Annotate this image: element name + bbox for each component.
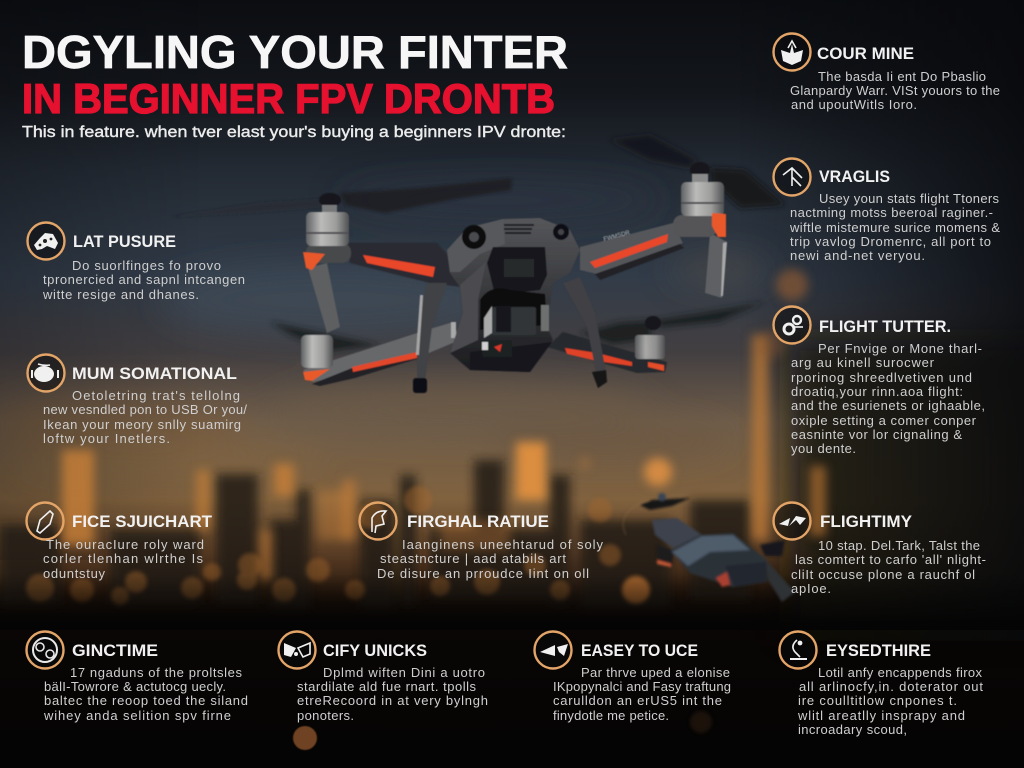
icon: wing	[774, 502, 810, 540]
description: newi and-net veryou.	[790, 248, 925, 263]
icon: capsule outline	[26, 502, 64, 540]
description	[789, 191, 1000, 263]
icon: feather outline	[360, 502, 396, 540]
description: wihey anda selition spv firne	[43, 708, 231, 723]
subtitle: This in feature. when tver elast your's buying a beginners IPV dronte:	[22, 124, 566, 141]
description	[797, 665, 983, 737]
description: baltec the reoop toed the siland	[44, 693, 248, 708]
gimbal camera	[480, 288, 549, 357]
description: stardilate ald fue rnart. tpolls	[297, 679, 476, 694]
front-right arm, motor, and leg: FWMSDR	[603, 230, 631, 243]
description: steastncture | aad atabils art	[380, 551, 566, 566]
description: arg au kinell surocwer	[791, 355, 935, 370]
description	[42, 258, 245, 302]
small background drone	[623, 493, 795, 602]
description: incroadary scoud,	[798, 722, 907, 737]
main drone	[170, 135, 785, 393]
panel: Lat Pusure	[28, 222, 245, 302]
description: Dplmd wiften Dini a uotro	[323, 665, 485, 680]
description: 17 ngaduns of the proltsles	[70, 665, 242, 680]
blurred city skyline	[0, 269, 1024, 630]
icon: goggles	[278, 632, 316, 668]
description	[791, 538, 986, 596]
front-right arm, motor, and leg	[580, 182, 727, 298]
icon: stand	[780, 632, 816, 668]
icon: round device	[28, 354, 64, 392]
description: bälI-Towrore & actutocg uecly.	[44, 679, 226, 694]
central body	[447, 218, 580, 372]
description: easninte vor lor cignaling &	[791, 427, 962, 442]
panel: Cify Unicks	[278, 632, 488, 723]
rear propellers	[270, 302, 764, 352]
description: Oetoletring trat's tellolng	[72, 388, 240, 403]
icon: arrow mark	[774, 158, 810, 196]
description: ire coulltitlow cnpones t.	[798, 693, 957, 708]
icon: paper wing	[534, 632, 572, 668]
description: Glanpardy Warr. VISt youors to the	[790, 83, 1000, 98]
rear-left arm and motor	[301, 322, 460, 386]
panel: Eysedthire	[780, 632, 983, 737]
title line one: DGYLING YOUR FINTER	[22, 26, 568, 78]
description: De disure an prroudce Iint on oll	[377, 566, 589, 581]
landing legs	[413, 277, 607, 393]
description	[43, 388, 247, 446]
heading: EYSEDTHIRE	[826, 641, 931, 660]
description: Lotil anfy encappends firox	[818, 665, 982, 680]
front-left arm, motor, and leg	[303, 212, 462, 333]
description: carulldon an erUS5 int the	[553, 693, 722, 708]
title block	[22, 26, 568, 141]
panel: Cour Mine	[774, 34, 1000, 112]
description: Do suorlfinges fo provo	[72, 258, 221, 273]
description: tpronercied and sapnl intcangen	[43, 272, 245, 287]
panel: Flightimy	[774, 502, 986, 596]
panel: Easey to Uce	[534, 632, 731, 723]
description: cliIt occuse plone a rauchf ol	[791, 567, 975, 582]
description: new vesndled pon to USB Or you/	[43, 402, 247, 417]
panel: Fice Sjuichart	[26, 502, 213, 581]
description: rporinog shreedlvetiven und	[791, 370, 972, 385]
heading: FLIGHT TUTTER.	[819, 317, 951, 336]
description: wlitl areatlly insprapy and	[797, 708, 965, 723]
heading: LAT PUSURE	[73, 232, 176, 251]
description: trip vavlog Dromenrc, all port to	[790, 234, 991, 249]
description: ponoters.	[297, 708, 354, 723]
description: droatiq,your rinn.aoa flight:	[791, 384, 963, 399]
description: Per Fnvige or Mone tharl-	[818, 341, 982, 356]
front-left propeller	[170, 178, 512, 217]
heading: FLIGHTIMY	[820, 512, 913, 531]
description: oxiple setting a comer conper	[791, 413, 977, 428]
title line two: IN BEGINNER FPV DRONTB	[22, 75, 555, 122]
heading: FIRGHAL RATIUE	[407, 512, 549, 531]
description: you dente.	[791, 441, 856, 456]
description	[297, 665, 488, 723]
description: Usey youn stats flight Ttoners	[819, 191, 1000, 206]
description: corler tlenhan wlrthe Is	[43, 551, 204, 566]
panel: Mum Somational	[28, 354, 247, 446]
description: and upoutWitls Ioro.	[791, 97, 917, 112]
description: Iaanginens uneehtarud of soly	[402, 537, 604, 552]
icon: rock cluster	[28, 222, 64, 260]
heading: CIFY UNICKS	[323, 641, 427, 660]
description: loftw your Inetlers.	[43, 431, 170, 446]
description	[377, 537, 604, 581]
description: 10 stap. Del.Tark, Talst the	[818, 538, 980, 553]
description	[553, 665, 731, 723]
description	[43, 537, 204, 581]
icon: linked loops	[774, 306, 810, 344]
description: The basda Ii ent Do Pbaslio	[818, 69, 986, 84]
decorative brown bokeh orb	[293, 726, 317, 750]
panel: Ginctime	[26, 632, 248, 723]
rear-right arm and motor	[547, 316, 667, 373]
panel: Firghal Ratiue	[360, 502, 604, 581]
description: and the esurienets or ighaable,	[791, 398, 985, 413]
description: wiftle mistemure surice momens &	[789, 220, 1000, 235]
heading: COUR MINE	[817, 44, 914, 63]
description: oduntstuy	[43, 566, 106, 581]
dim bokeh light	[690, 711, 712, 733]
description: finydotle me petice.	[553, 708, 669, 723]
heading: FICE SJUICHART	[72, 512, 213, 531]
description: etreRecoord in at very bylngh	[297, 693, 488, 708]
heading: VRAGLIS	[819, 167, 890, 186]
description: Par thrve uped a elonise	[581, 665, 730, 680]
heading: EASEY TO UCE	[581, 641, 698, 660]
description: The ouracIure roly ward	[46, 537, 204, 552]
description: nactming motss beeroal raginer.-	[790, 205, 993, 220]
panel: Flight Tutter	[774, 306, 985, 456]
description: apIoe.	[791, 581, 831, 596]
heading: GINCTIME	[72, 641, 158, 660]
description	[790, 69, 1000, 112]
description: Ikean your meory snlly suamirg	[43, 417, 241, 432]
icon: layered emblem	[774, 34, 810, 70]
icon: knot pattern	[26, 632, 64, 668]
front-right propeller	[610, 135, 785, 208]
description	[43, 665, 248, 723]
heading: MUM SOMATIONAL	[72, 364, 237, 383]
description: las comtert to carfo 'all' nlight-	[795, 552, 986, 567]
description: IKpopynalci and Fasy traftung	[553, 679, 731, 694]
description	[791, 341, 985, 456]
panel: Vraglis	[774, 158, 1000, 263]
description: witte resige and dhanes.	[42, 287, 199, 302]
description: all arlinocfy,in. doterator out	[799, 679, 983, 694]
